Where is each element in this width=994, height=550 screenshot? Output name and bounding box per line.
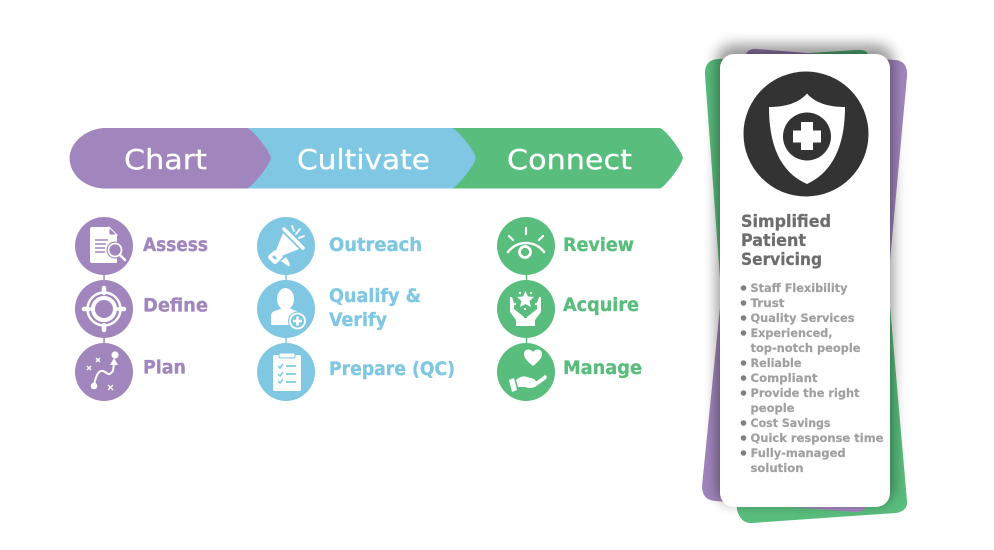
label: Qualify & Verify: Qualify & — [329, 285, 421, 307]
label: Define: Define — [143, 294, 208, 316]
list: benefits: people — [750, 401, 795, 415]
icon: Prepare clipboard checklist — [257, 343, 315, 401]
label: Qualify & Verify: Verify — [329, 309, 388, 331]
heading: Cultivate: Cultivate — [297, 143, 430, 176]
list: benefits: Experienced, — [750, 326, 832, 340]
label: Prepare (QC): Prepare (QC) — [329, 358, 455, 380]
list: benefits: Compliant — [750, 371, 818, 385]
icon: Manage hand with heart — [497, 343, 555, 401]
chevron: Connect — [440, 128, 683, 188]
list: benefits: Provide the right — [750, 386, 860, 400]
list: benefits: Staff Flexibility — [750, 281, 848, 295]
list: benefits: solution — [750, 461, 804, 475]
label: Plan: Plan — [143, 356, 186, 378]
label: Acquire: Acquire — [563, 294, 639, 316]
list: benefits: Cost Savings — [750, 416, 831, 430]
list: benefits: top-notch people — [750, 341, 861, 355]
label: Review: Review — [563, 234, 634, 256]
banner: Chart, Cultivate, Connect chevrons — [70, 128, 683, 188]
icon: shield with medical cross — [744, 72, 868, 196]
icon: Qualify and verify person with plus — [257, 280, 315, 338]
column: Cultivate steps — [257, 217, 455, 401]
panel: Simplified Patient Servicing card — [702, 45, 907, 523]
chevron: Chart — [70, 128, 271, 188]
list: benefits: Quick response time — [750, 431, 884, 445]
column: Chart steps — [75, 217, 208, 401]
heading: Simplified Patient Servicing: Patient — [741, 231, 806, 251]
card back: purple — [702, 49, 907, 512]
heading: Simplified Patient Servicing — [741, 212, 831, 270]
column: Connect steps — [497, 217, 642, 401]
chevron: Cultivate — [235, 128, 476, 188]
heading: Simplified Patient Servicing: Servicing — [741, 250, 822, 270]
list: benefits: Trust — [750, 296, 785, 310]
list: benefits — [741, 281, 884, 475]
icon: Acquire hands holding star — [497, 280, 555, 338]
label: Manage: Manage — [563, 357, 642, 379]
heading: Connect: Connect — [507, 143, 632, 176]
icon: Review eye — [497, 217, 555, 275]
list: benefits: Reliable — [750, 356, 802, 370]
icon: Define target — [75, 280, 133, 338]
label: Assess: Assess — [143, 234, 208, 256]
card back: green — [705, 50, 907, 523]
heading: Simplified Patient Servicing: Simplified — [741, 212, 831, 232]
heading: Chart: Chart — [124, 143, 207, 176]
label: Qualify & Verify — [329, 285, 421, 331]
card front — [720, 54, 890, 507]
icon: Assess document with magnifier — [75, 217, 133, 275]
list: benefits: Quality Services — [750, 311, 855, 325]
icon: Outreach megaphone — [257, 217, 315, 275]
icon: Plan route — [75, 343, 133, 401]
label: Outreach: Outreach — [329, 234, 422, 256]
list: benefits: Fully-managed — [750, 446, 846, 460]
